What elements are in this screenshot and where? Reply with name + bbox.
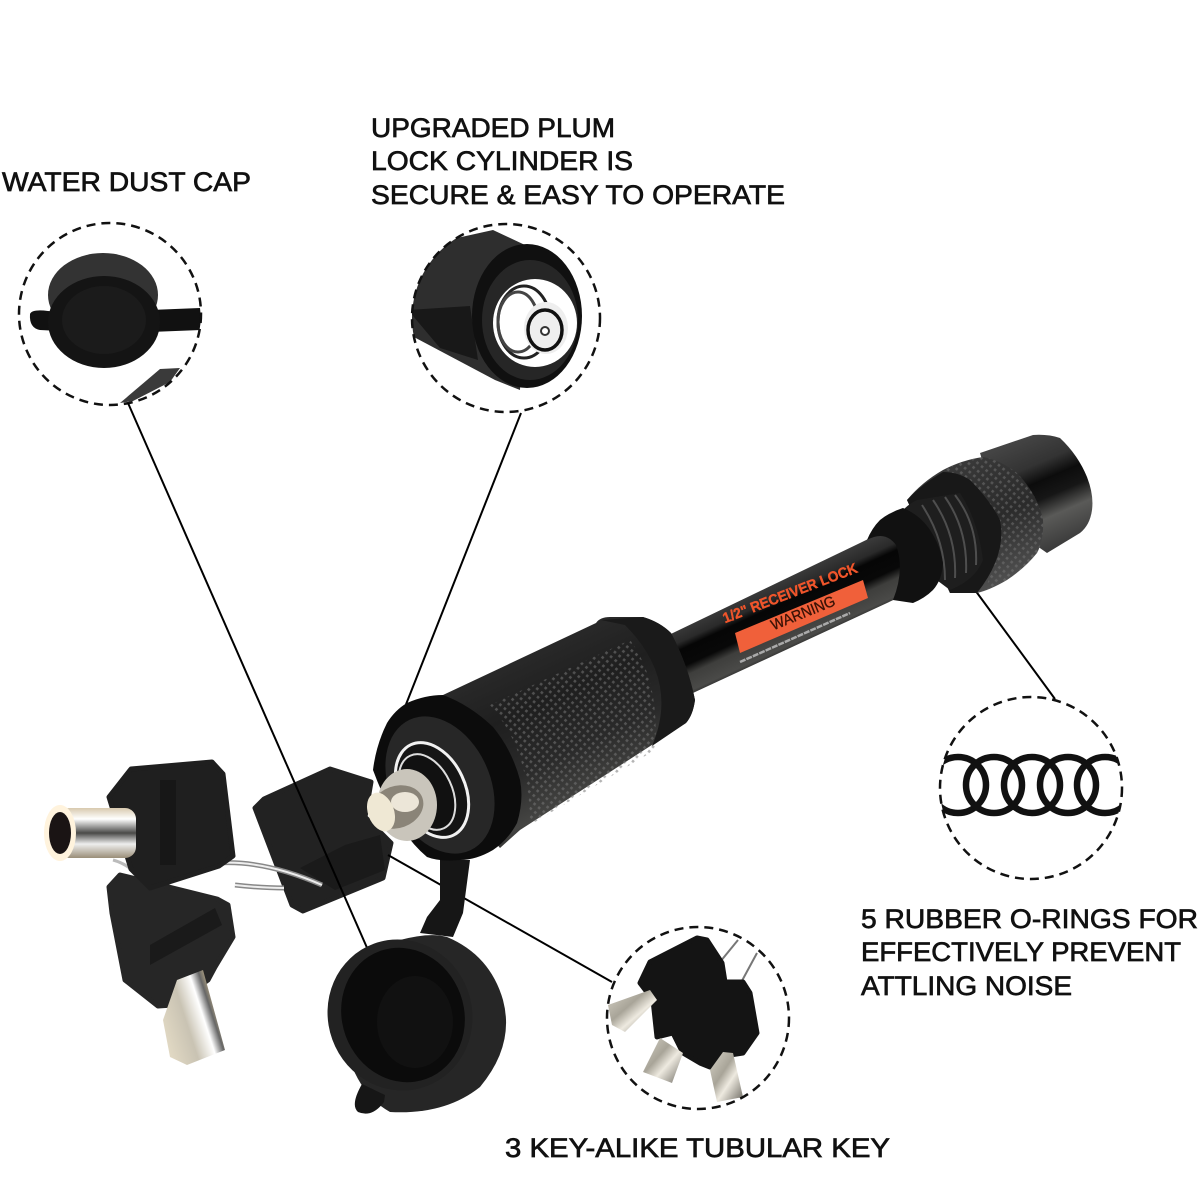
warning label: 1/2" RECEIVER LOCK <box>721 561 860 627</box>
callout circle: dust cap <box>19 223 202 405</box>
heading: plum lock cylinder <box>371 113 785 210</box>
heading: rubber o-rings <box>861 904 1198 1001</box>
shaft <box>650 521 915 699</box>
warning label: WARNING <box>768 593 838 634</box>
heading: water dust cap: WATER DUST CAP <box>2 167 251 197</box>
heading: plum lock cylinder: SECURE & EASY TO OPERATE <box>371 180 785 210</box>
front flange <box>373 695 521 861</box>
rubber ribs <box>903 493 983 590</box>
rear knurled nut <box>907 457 1043 593</box>
key: top <box>44 762 233 888</box>
callout circle: o-rings <box>930 697 1133 879</box>
key: bottom <box>109 875 233 1065</box>
heading: plum lock cylinder: UPGRADED PLUM <box>371 113 615 143</box>
chrome rings <box>381 731 483 849</box>
heading: rubber o-rings: EFFECTIVELY PREVENT <box>861 937 1181 967</box>
heading: rubber o-rings: ATTLING NOISE <box>861 971 1072 1001</box>
key ring <box>113 860 322 888</box>
heading: tubular key: 3 KEY-ALIKE TUBULAR KEY <box>505 1133 890 1163</box>
main knurled body <box>443 617 695 848</box>
callout circle: three keys <box>607 927 789 1109</box>
heading: plum lock cylinder: LOCK CYLINDER IS <box>371 146 633 176</box>
leader lines <box>128 403 1055 982</box>
rear flange <box>867 508 943 603</box>
callout circle: lock cylinder <box>405 224 600 412</box>
rear end cap <box>980 435 1092 553</box>
lock post <box>362 769 437 841</box>
heading: rubber o-rings: 5 RUBBER O-RINGS FOR <box>861 904 1198 934</box>
key in lock <box>255 769 391 911</box>
warning label <box>721 561 868 662</box>
dust cap with strap <box>306 860 506 1114</box>
